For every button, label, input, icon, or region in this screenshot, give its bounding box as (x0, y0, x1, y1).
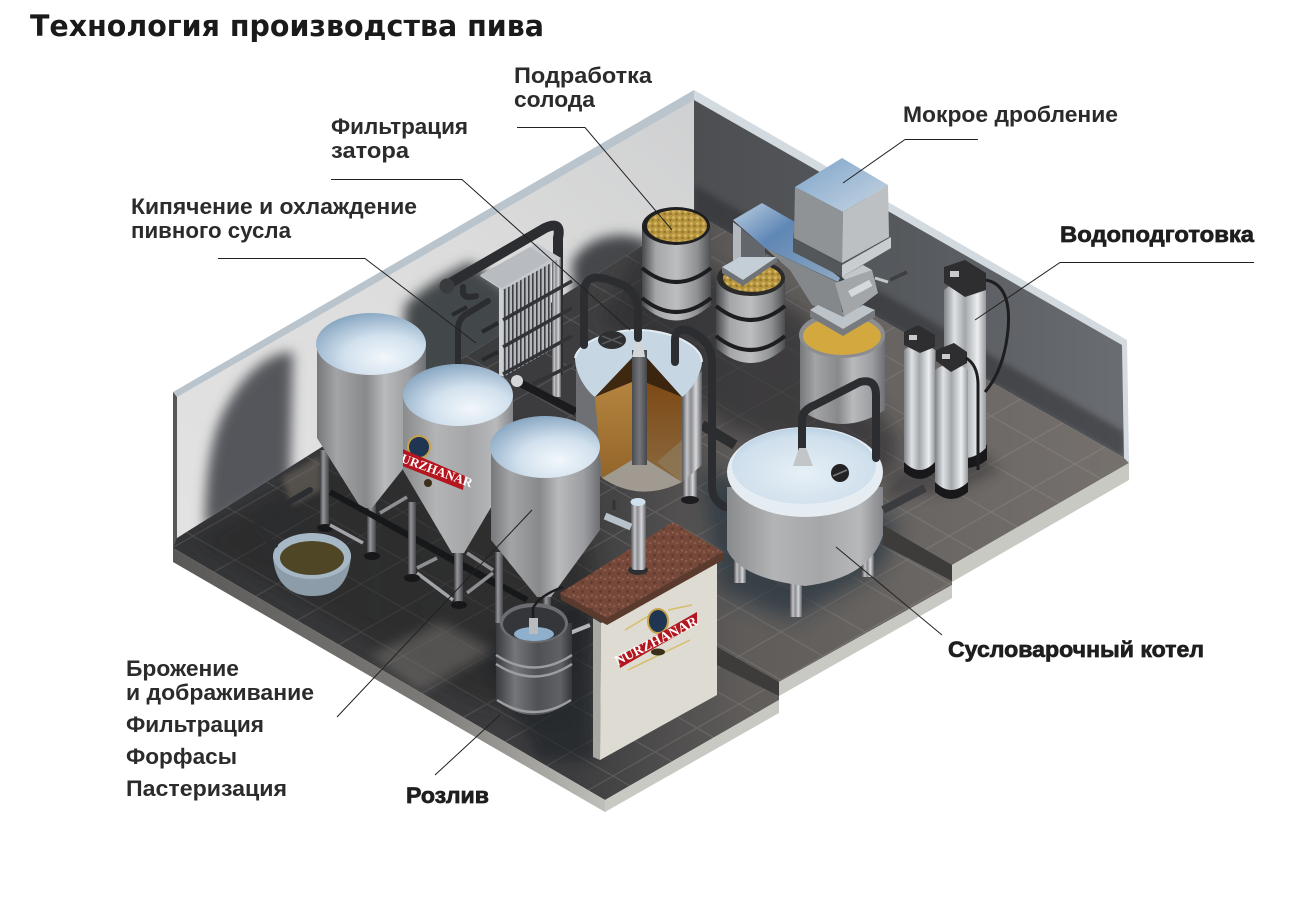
wort kettle (727, 381, 925, 617)
cut interior (595, 340, 682, 492)
tank logo (403, 435, 472, 490)
lid (727, 427, 883, 517)
barrel: malt 1 (642, 207, 711, 320)
label: malt preparation: Подработка (514, 63, 653, 88)
label: mash filtration: Фильтрация (331, 114, 468, 139)
fermentation tank 1 (316, 313, 426, 560)
column and base plate (722, 222, 777, 286)
main pipe (447, 226, 559, 372)
fin pack (503, 263, 551, 377)
leader lines (218, 128, 1254, 775)
label: malt preparation: солода (514, 87, 596, 112)
label: boiling and cooling (131, 194, 417, 243)
floor (173, 213, 1129, 812)
barrel: crushed malt (799, 312, 885, 424)
label: boiling and cooling: Кипячение и охлаждение (131, 194, 417, 219)
lid (575, 330, 702, 397)
connecting pipe (883, 488, 925, 510)
floor beam (702, 425, 735, 445)
label: fermentation list: Форфасы (126, 744, 237, 769)
counter side strip (593, 618, 601, 760)
heat exchanger with pipes (440, 226, 576, 412)
vent cone and pipe (802, 381, 876, 458)
water filter A (944, 260, 1009, 468)
outlet pipe (518, 382, 576, 412)
body sides (576, 358, 602, 478)
rear frame (480, 243, 561, 397)
wet mill (722, 158, 907, 336)
lid hatch (598, 331, 626, 349)
fermentation tank 2 (403, 364, 513, 609)
room: walls and floor (173, 90, 1129, 812)
label: fermentation list: Пастеризация (126, 776, 287, 801)
label: water treatment: Водоподготовка (1060, 222, 1255, 247)
stone top (560, 552, 723, 625)
counter front face (600, 558, 717, 760)
title: Технология производства пива (30, 9, 544, 43)
beer tap (605, 498, 648, 575)
label: fermentation list: и дображивание (126, 680, 314, 705)
hatch (831, 464, 849, 482)
hopper box (793, 158, 891, 277)
counter (560, 498, 723, 760)
grinder (810, 265, 907, 336)
body (727, 487, 883, 586)
legs (790, 575, 802, 617)
water filter B (904, 325, 935, 479)
leg (683, 470, 697, 500)
label: mash filtration: затора (331, 138, 410, 163)
chute (765, 248, 843, 317)
tank logo: NURZHANAR (390, 447, 475, 490)
label: wet milling: Мокрое дробление (903, 102, 1118, 127)
tie rods (503, 281, 572, 384)
water filter C (935, 343, 978, 499)
label: fermentation list: Фильтрация (126, 712, 264, 737)
barrel: malt 2 (716, 260, 785, 363)
label: fermentation list: Брожение (126, 656, 239, 681)
label: bottling: Розлив (406, 783, 489, 808)
label: mash filtration (331, 114, 468, 163)
side connections (463, 287, 476, 297)
label: malt preparation (514, 63, 653, 112)
arm top (733, 203, 840, 282)
floor edge and steps (883, 525, 952, 581)
counter logo: NURZHANAR (612, 614, 701, 669)
top plate (480, 247, 550, 288)
bowl (273, 533, 351, 596)
mash pipes (584, 278, 638, 345)
keg (496, 587, 590, 715)
pipework under tanks (257, 490, 527, 600)
label: boiling and cooling: пивного сусла (131, 218, 292, 243)
mash filtration tank cutaway (575, 278, 735, 507)
label: wort kettle: Сусловарочный котел (948, 637, 1204, 662)
right wall (694, 90, 1129, 463)
label: fermentation list (126, 656, 314, 801)
left wall (173, 90, 694, 562)
fermentation tank 3 (490, 416, 600, 630)
